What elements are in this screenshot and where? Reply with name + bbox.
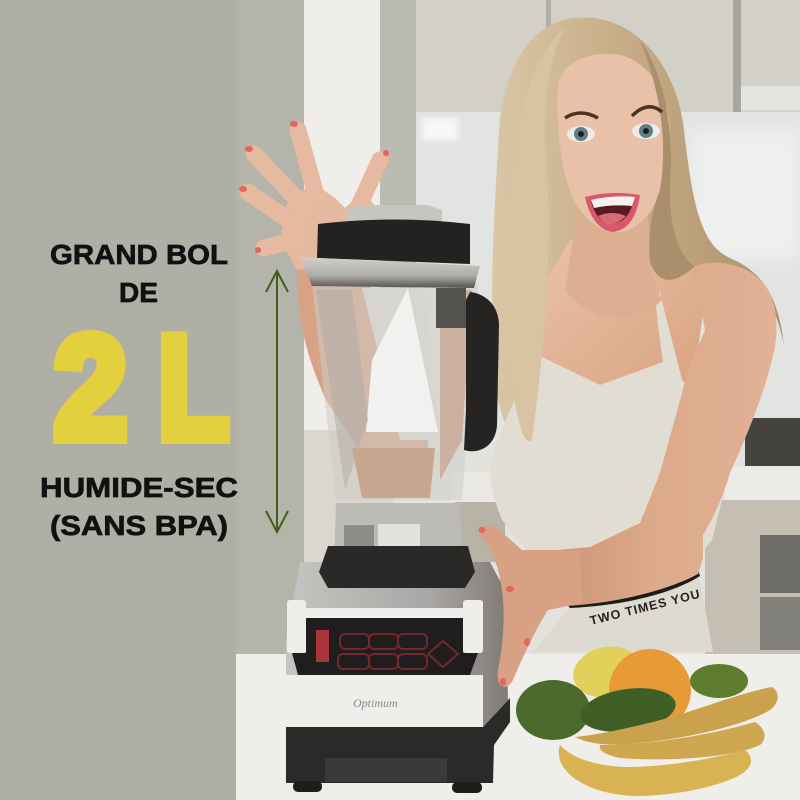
shorts (533, 570, 713, 652)
lid cap (347, 205, 442, 224)
neck (565, 210, 662, 318)
lemon (569, 640, 645, 704)
white front (286, 675, 483, 727)
shorts text: TWO TIMES YOU (588, 587, 702, 628)
lid (317, 220, 470, 264)
jar (312, 284, 478, 500)
arrow: jar height (266, 271, 288, 532)
lower hand (478, 525, 582, 687)
tank top (490, 290, 727, 563)
jar base (334, 503, 462, 566)
heading: grand bol de: GRAND BOL (50, 239, 228, 270)
rim (300, 257, 480, 288)
background: kitchen (236, 0, 800, 660)
avocado middle (578, 683, 678, 737)
eyes (567, 126, 595, 142)
display (292, 618, 478, 675)
mount (319, 546, 475, 588)
black base (286, 698, 510, 783)
text: humide-sec sans BPA (40, 472, 238, 541)
counter (236, 654, 800, 800)
raised hand (239, 121, 430, 470)
heading: 2L (54, 306, 229, 469)
heading: grand bol de (50, 239, 228, 308)
heading: 2L: 2 (54, 306, 127, 469)
chest skin (532, 240, 705, 392)
front hair strands (507, 28, 565, 441)
fruit (516, 640, 778, 796)
text: humide-sec sans BPA: (SANS BPA) (50, 510, 228, 541)
bananas (600, 722, 765, 759)
left panel (0, 0, 236, 800)
avocado left (516, 680, 590, 740)
motor body (286, 562, 508, 727)
heading: 2L: L (158, 306, 229, 469)
handle (464, 292, 499, 451)
orange (609, 649, 691, 731)
face (557, 54, 670, 232)
blender (286, 205, 510, 793)
avocado right (690, 664, 748, 698)
text: humide-sec sans BPA: HUMIDE-SEC (40, 472, 238, 503)
logo: Optimum (353, 696, 398, 710)
heading: grand bol de: DE (119, 277, 158, 308)
woman (490, 17, 784, 652)
mouth (585, 193, 640, 232)
arm (525, 263, 777, 606)
